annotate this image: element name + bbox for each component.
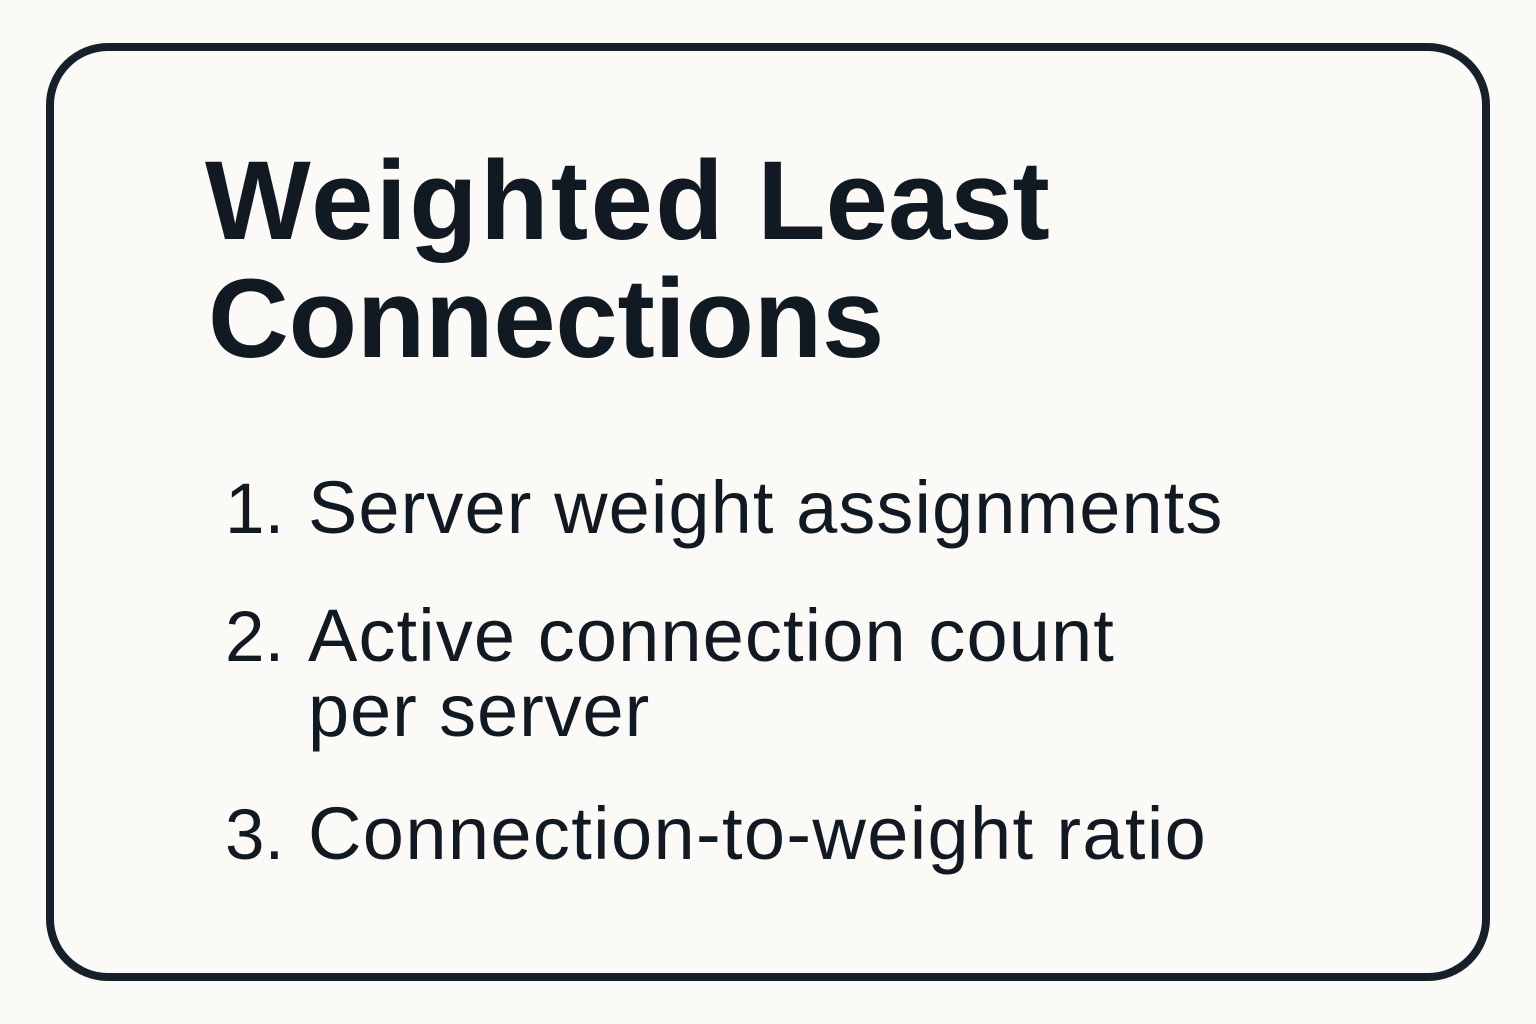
list item 1: Server weight assignments xyxy=(308,466,1223,549)
list item 2 xyxy=(225,594,1115,752)
title: Weighted Least xyxy=(205,138,1050,263)
list item 3: Connection-to-weight ratio xyxy=(308,792,1207,875)
numbered list xyxy=(225,466,1223,875)
title xyxy=(205,138,1050,381)
list item 2: per server xyxy=(308,669,650,752)
list item 2: 2. xyxy=(225,598,284,677)
list item 1: 1. xyxy=(225,470,284,549)
list item 3: 3. xyxy=(225,796,284,875)
title: Connections xyxy=(208,256,884,381)
list item 2: Active connection count xyxy=(308,594,1115,677)
